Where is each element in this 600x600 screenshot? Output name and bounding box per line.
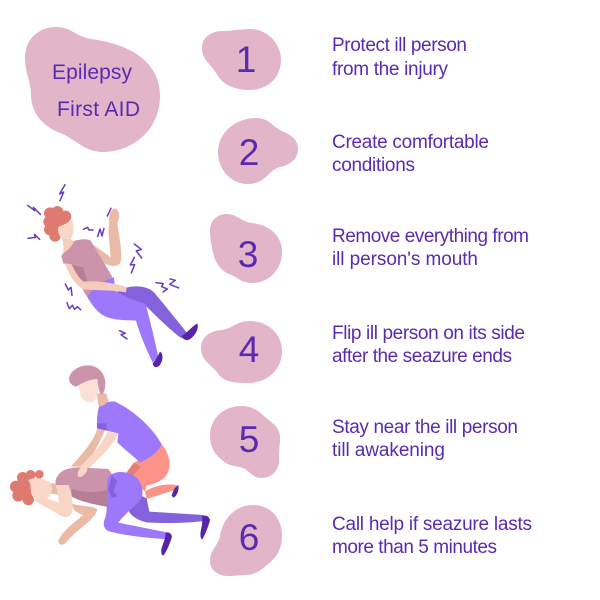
step 6 text: Call help if seazure lasts xyxy=(332,514,532,535)
step 6 number badge: 6 xyxy=(239,517,259,558)
step 2 text: Create comfortable xyxy=(332,132,489,153)
helper hair xyxy=(69,365,105,395)
patient hair xyxy=(10,470,44,505)
step 1 text: from the injury xyxy=(332,59,448,80)
back leg xyxy=(117,286,187,338)
step 6 text xyxy=(332,514,532,558)
patient neck xyxy=(48,483,59,495)
step 2 number badge: 2 xyxy=(239,132,259,173)
step 5 number badge: 5 xyxy=(239,419,259,460)
illustration: person having a seizure xyxy=(28,185,198,367)
helper shirt xyxy=(97,402,162,462)
helper face xyxy=(78,378,98,402)
step 5 text: till awakening xyxy=(332,440,445,461)
helper shorts xyxy=(126,444,170,492)
title badge: Epilepsy xyxy=(52,61,132,84)
step 4 text xyxy=(332,323,525,367)
patient near arm xyxy=(33,485,73,517)
step 5 text xyxy=(332,417,518,461)
step 4 number badge xyxy=(201,321,282,383)
helper lower leg xyxy=(145,484,177,499)
lightning marks xyxy=(28,185,179,339)
step 2 number badge xyxy=(218,118,298,184)
step 3 text xyxy=(332,226,529,270)
helper far arm xyxy=(71,429,105,467)
step 2 text: conditions xyxy=(332,155,415,176)
step 1 number badge xyxy=(202,29,281,90)
step 3 number badge: 3 xyxy=(238,234,258,275)
step 1 text xyxy=(332,35,467,80)
patient shirt xyxy=(55,467,112,507)
helper foot xyxy=(172,485,179,498)
patient far arm xyxy=(58,503,97,545)
step 1 number badge: 1 xyxy=(236,39,256,80)
raised arm xyxy=(85,208,121,266)
shoes xyxy=(182,323,198,340)
step 6 text: more than 5 minutes xyxy=(332,537,497,558)
front leg xyxy=(86,277,158,363)
neck xyxy=(62,237,74,253)
helper near arm xyxy=(78,432,118,476)
step 3 number badge xyxy=(210,214,282,283)
step 5 text: Stay near the ill person xyxy=(332,417,518,438)
step 3 text: ill person's mouth xyxy=(332,249,478,270)
step 6 number badge xyxy=(210,505,282,576)
title badge xyxy=(25,27,160,152)
helper hand xyxy=(78,466,87,477)
step 1 text: Protect ill person xyxy=(332,35,467,56)
title badge: First AID xyxy=(57,98,140,121)
hair xyxy=(43,206,71,242)
step 3 text: Remove everything from xyxy=(332,226,529,247)
step 4 text: Flip ill person on its side xyxy=(332,323,525,344)
helper neck xyxy=(97,393,109,407)
patient front leg xyxy=(104,472,167,539)
step 5 number badge xyxy=(210,406,280,478)
face xyxy=(58,220,73,239)
patient face xyxy=(28,478,52,499)
illustration: helper placing person in recovery position xyxy=(10,365,210,556)
patient shoes xyxy=(200,516,210,539)
lower arm xyxy=(65,263,127,292)
patient back leg xyxy=(128,493,204,523)
shirt xyxy=(61,239,113,297)
step 4 text: after the seazure ends xyxy=(332,346,512,367)
step 2 text xyxy=(332,132,489,176)
step 4 number badge: 4 xyxy=(239,329,259,370)
